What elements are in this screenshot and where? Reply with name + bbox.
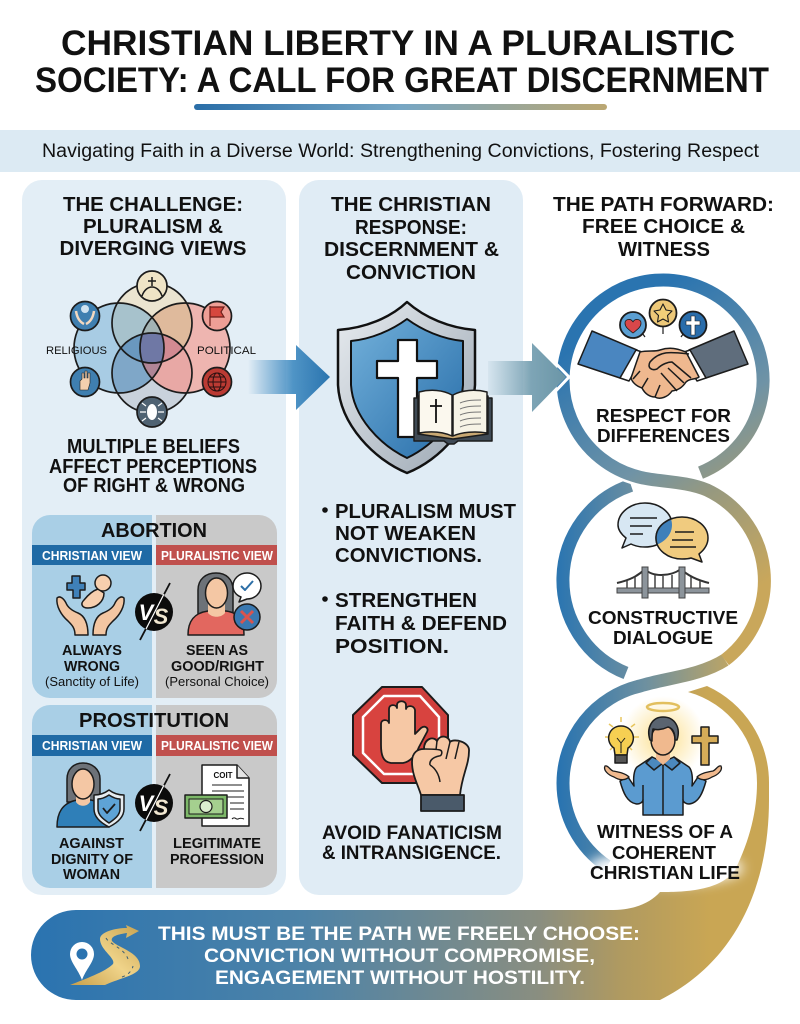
icon: woman with choices <box>188 573 261 635</box>
challenge heading: PLURALISM & <box>83 215 223 238</box>
title: SOCIETY: A CALL FOR GREAT DISCERNMENT <box>35 61 769 100</box>
dialogue text: CONSTRUCTIVE <box>588 607 738 628</box>
abortion pluralistic text: GOOD/RIGHT <box>171 659 264 675</box>
witness text <box>590 821 740 883</box>
icon: contract and money: COIT <box>213 771 233 780</box>
icon: golden road <box>70 925 140 985</box>
venn icon: bottom <box>137 397 167 427</box>
abortion pluralistic text <box>165 643 269 689</box>
respect text <box>596 405 731 446</box>
beliefs caption: MULTIPLE BELIEFS <box>67 436 240 458</box>
panel: path forward heading: FREE CHOICE & <box>582 215 745 238</box>
closing banner <box>31 686 769 1000</box>
response heading: DISCERNMENT & <box>324 238 499 261</box>
prostitution pluralistic text: LEGITIMATE <box>173 836 261 852</box>
pluralistic view header <box>156 735 277 756</box>
venn icon: globe <box>202 368 232 396</box>
respect text: DIFFERENCES <box>597 425 730 446</box>
response heading: THE CHRISTIAN <box>331 193 491 216</box>
christian view header <box>32 735 152 756</box>
beliefs caption <box>49 436 257 497</box>
christian view header <box>32 545 152 565</box>
icon: open bible <box>414 390 492 444</box>
bullet: strengthen: FAITH & DEFEND <box>335 612 507 635</box>
icon: bridge <box>617 567 709 598</box>
icon: map pin <box>70 942 94 980</box>
vs badge <box>135 583 173 640</box>
witness text: WITNESS OF A <box>597 821 733 842</box>
icon: stop sign and fist <box>353 687 469 811</box>
icon: woman with shield <box>57 763 124 827</box>
challenge heading: DIVERGING VIEWS <box>60 237 246 260</box>
banner text: ENGAGEMENT WITHOUT HOSTILITY. <box>215 967 585 989</box>
dialogue text: DIALOGUE <box>613 627 713 648</box>
response heading: RESPONSE: <box>355 216 467 239</box>
response heading: CONVICTION <box>346 261 476 284</box>
subtitle band <box>0 130 800 172</box>
bullet: pluralism <box>322 500 516 567</box>
pluralistic view header: PLURALISTIC VIEW <box>161 738 274 753</box>
witness text: CHRISTIAN LIFE <box>590 862 740 883</box>
respect text: RESPECT FOR <box>596 405 731 426</box>
venn icon: top <box>137 271 167 301</box>
vs badge: V <box>139 600 156 625</box>
icon: speech bubbles <box>618 503 708 562</box>
abortion pluralistic text: (Personal Choice) <box>165 675 269 689</box>
avoid fanaticism text <box>322 823 502 864</box>
witness text: COHERENT <box>612 842 717 863</box>
subtitle band: Navigating Faith in a Diverse World: Strengthening Convictions, Fostering Respect <box>42 141 760 162</box>
title <box>35 24 769 100</box>
icon: witness person <box>605 696 721 815</box>
dialogue text <box>588 607 738 648</box>
icon: handshake <box>578 300 748 398</box>
bullet: pluralism: PLURALISM MUST <box>335 500 516 523</box>
icon: hands with baby and cross <box>57 575 124 635</box>
bullet: pluralism: NOT WEAKEN <box>335 522 476 545</box>
prostitution title: PROSTITUTION <box>79 710 229 732</box>
venn icon: raised hand <box>70 368 100 396</box>
prostitution pluralistic text <box>170 836 264 868</box>
label: religious: RELIGIOUS <box>46 345 107 357</box>
arrow: response to path <box>488 341 569 414</box>
label: political: POLITICAL <box>197 345 256 357</box>
venn diagram <box>46 271 256 427</box>
trait circles <box>620 300 706 338</box>
pluralistic view header: PLURALISTIC VIEW <box>161 548 274 563</box>
beliefs caption: AFFECT PERCEPTIONS <box>49 456 257 478</box>
bullet: strengthen: STRENGTHEN <box>335 589 477 612</box>
avoid fanaticism text: AVOID FANATICISM <box>322 823 502 844</box>
prostitution christian text: DIGNITY OF <box>51 852 133 868</box>
text halo <box>587 851 743 885</box>
challenge heading <box>60 193 246 260</box>
pluralistic view header <box>156 545 277 565</box>
icon: shield with cross <box>338 302 475 473</box>
prostitution pluralistic text: PROFESSION <box>170 852 264 868</box>
arrow: challenge to response <box>248 345 330 410</box>
panel: abortion <box>32 515 277 698</box>
title: CHRISTIAN LIBERTY IN A PLURALISTIC <box>61 24 735 63</box>
prostitution christian text: AGAINST <box>59 836 124 852</box>
bullet: pluralism: CONVICTIONS. <box>335 544 482 567</box>
panel: christian response <box>299 180 523 895</box>
banner text: THIS MUST BE THE PATH WE FREELY CHOOSE: <box>158 923 640 945</box>
flowing ribbon with rings <box>563 280 764 866</box>
challenge heading: THE CHALLENGE: <box>63 193 243 216</box>
banner text <box>158 923 640 989</box>
abortion christian text: (Sanctity of Life) <box>45 675 139 689</box>
abortion christian text <box>45 643 139 689</box>
avoid fanaticism text: & INTRANSIGENCE. <box>322 843 501 864</box>
response heading <box>324 193 499 284</box>
person body <box>605 717 721 815</box>
panel: path forward heading: THE PATH FORWARD: <box>553 193 774 216</box>
vs badge: V <box>139 791 156 816</box>
abortion pluralistic text: SEEN AS <box>186 643 248 659</box>
lightbulb <box>605 717 639 763</box>
vs badge <box>135 774 173 831</box>
abortion christian text: ALWAYS <box>62 643 122 659</box>
bullet: strengthen: POSITION. <box>335 635 449 658</box>
panel: path forward heading <box>553 193 774 261</box>
venn icon: flag <box>202 302 232 330</box>
venn icon: hands <box>70 302 100 330</box>
prostitution christian text <box>51 836 133 883</box>
abortion christian text: WRONG <box>64 659 120 675</box>
panel: path forward heading: WITNESS <box>618 238 710 261</box>
title underline <box>194 104 607 110</box>
gold cross <box>692 727 718 765</box>
beliefs caption: OF RIGHT & WRONG <box>63 475 245 497</box>
bullet: strengthen <box>322 589 507 658</box>
vs badge: S <box>154 795 169 820</box>
christian view header: CHRISTIAN VIEW <box>42 548 143 563</box>
banner text: CONVICTION WITHOUT COMPROMISE, <box>204 945 595 967</box>
panel: prostitution <box>32 705 277 888</box>
panel: the challenge <box>22 180 286 895</box>
vs badge: S <box>154 604 169 629</box>
icon: contract and money <box>185 765 249 826</box>
abortion title: ABORTION <box>101 520 207 542</box>
christian view header: CHRISTIAN VIEW <box>42 738 143 753</box>
prostitution christian text: WOMAN <box>63 867 120 883</box>
